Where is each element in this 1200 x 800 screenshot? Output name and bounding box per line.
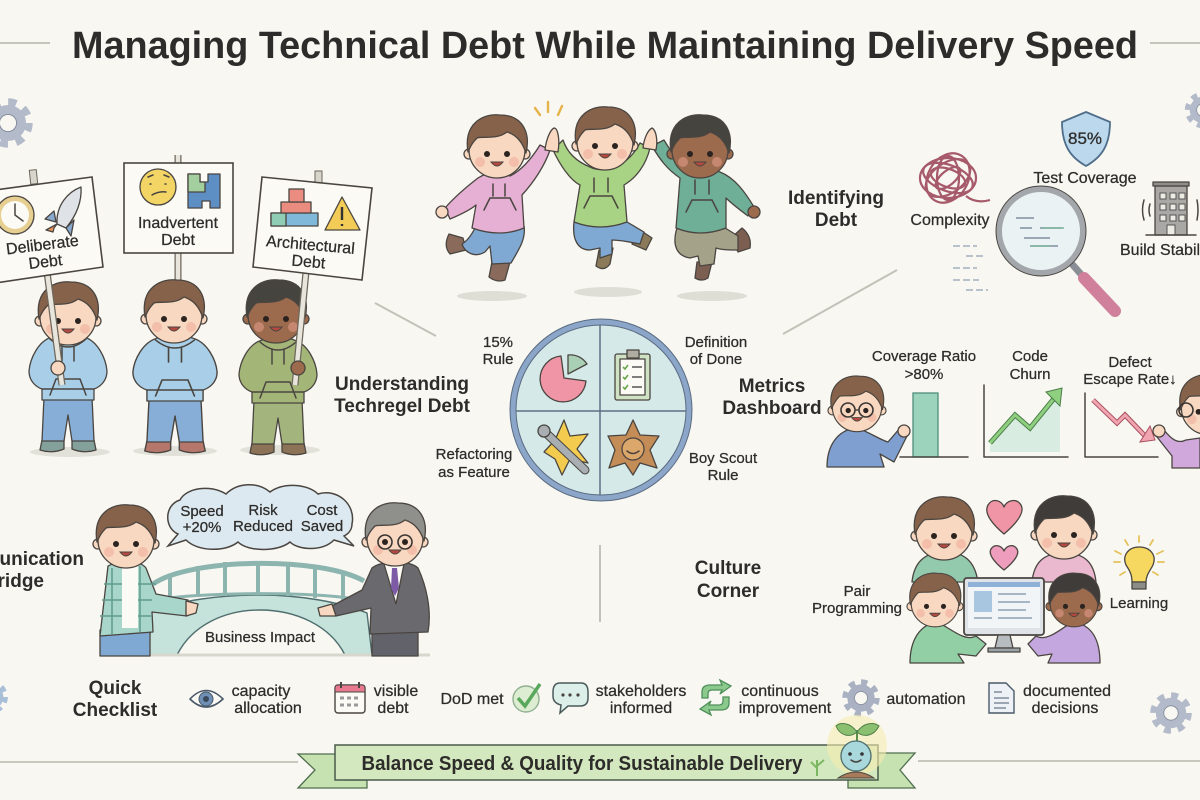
heading: culture corner [695, 558, 761, 602]
label: 15% rule: Rule [483, 351, 513, 368]
businessman [318, 503, 429, 656]
chart: code churn: Code [1012, 348, 1048, 365]
item: documented decisions: decisions [1032, 700, 1098, 717]
sign kid: deliberate debt: Deliberate [5, 233, 80, 258]
chart: code churn: Churn [1010, 366, 1050, 383]
icon: scout badge [608, 420, 659, 475]
label: boy scout rule: Boy Scout [689, 450, 758, 467]
item: continuous improvement [700, 680, 832, 717]
icon: gear bottom right [1153, 695, 1189, 731]
heading: quick checklist: Quick [89, 678, 142, 699]
panel: celebrating kids [436, 102, 760, 301]
label: definition of done: of Done [690, 351, 742, 368]
panel: communication bridge [0, 485, 430, 656]
icon: tangled yarn complexity [910, 145, 990, 229]
icon: tangled yarn complexity: Complexity [910, 212, 990, 229]
chart: code churn [984, 348, 1068, 457]
label: boy scout rule: Rule [708, 467, 738, 484]
kid: teal hoodie [652, 115, 760, 301]
panel: culture corner [695, 496, 1168, 663]
kid: green hoodie [553, 107, 652, 297]
connector line [783, 270, 897, 334]
bridge: Business Impact [205, 629, 316, 646]
speech cloud: Reduced [233, 518, 293, 535]
label: 15% rule: 15% [483, 334, 513, 351]
item: stakeholders informed [553, 683, 686, 717]
speech cloud [168, 485, 354, 550]
label: pair programming: Programming [812, 600, 902, 617]
item: capacity allocation [190, 683, 302, 717]
icon: magnifying glass [953, 186, 1115, 311]
icon: gear top left [0, 102, 29, 144]
label: boy scout rule [689, 450, 758, 484]
speech cloud: Saved [301, 518, 343, 535]
item: continuous improvement: improvement [739, 700, 832, 717]
panel: quick checklist [73, 678, 1111, 721]
item: visible debt: visible [374, 683, 418, 700]
sign kid: inadvertent debt: Debt [161, 232, 195, 249]
icon: pie chart [540, 355, 587, 402]
sign kid: inadvertent debt: Inadvertent [138, 215, 219, 232]
chart: defect escape rate: Defect [1108, 354, 1153, 371]
panel: metrics dashboard [722, 348, 1200, 468]
speech cloud: +20% [183, 519, 221, 536]
icon: seedling mascot [827, 715, 887, 778]
icon: light bulb learning: Learning [1110, 595, 1168, 612]
kid bottom left [907, 573, 986, 663]
panel: identifying debt [783, 112, 1200, 334]
label: refactoring as feature: Refactoring [436, 446, 512, 463]
sign kid: deliberate debt: Debt [28, 252, 64, 273]
heading: understanding technical debt: Techregel Debt [334, 396, 471, 417]
sparkle [535, 102, 562, 115]
kid top left [911, 497, 978, 582]
icon: shield test coverage: 85% [1068, 129, 1102, 148]
heading: metrics dashboard [722, 376, 822, 419]
heading: identifying debt: Identifying [788, 188, 884, 209]
icon: light bulb learning [1110, 536, 1168, 612]
icon: gear top right [1188, 95, 1200, 125]
icon: gear bottom left [0, 683, 5, 711]
heading: identifying debt: Debt [815, 210, 858, 231]
chart: coverage ratio [872, 348, 976, 457]
heading: metrics dashboard: Metrics [739, 376, 805, 397]
item: stakeholders informed: informed [610, 700, 672, 717]
heading: quick checklist [73, 678, 158, 721]
center wheel: practices [375, 303, 758, 622]
item: visible debt [335, 682, 418, 717]
label: refactoring as feature [436, 446, 512, 481]
kid top right [1031, 496, 1097, 582]
label: pair programming [812, 583, 902, 617]
speech cloud: Speed [180, 503, 224, 520]
kid bottom right [1028, 573, 1102, 663]
quadrant circle [510, 319, 692, 501]
icon: shield test coverage: Test Coverage [1033, 170, 1137, 187]
kid: pink hoodie [436, 115, 550, 301]
kid with glasses left [827, 376, 910, 467]
label: 15% rule [483, 334, 513, 368]
heading: understanding technical debt [334, 374, 471, 417]
bridge [100, 561, 430, 655]
heading: identifying debt [788, 188, 884, 231]
title: Managing Technical Debt While Maintaining Delivery Speed [72, 25, 1138, 67]
item: automation: automation [886, 691, 966, 708]
heading: culture corner: Culture [695, 558, 761, 579]
icon: wrench and star [538, 420, 588, 475]
label: refactoring as feature: as Feature [438, 464, 510, 481]
heading: communication bridge [0, 549, 84, 592]
sign kid: deliberate debt [0, 170, 110, 457]
panel: understanding technical debt [0, 155, 471, 457]
icon: shield test coverage [1033, 112, 1137, 187]
sign kid: architectural debt: Architectural [265, 233, 355, 258]
item: stakeholders informed: stakeholders [596, 683, 686, 700]
chart: defect escape rate: Escape Rate↓ [1083, 371, 1177, 388]
item: automation [845, 682, 966, 714]
item: continuous improvement: continuous [741, 683, 819, 700]
item: visible debt: debt [377, 700, 409, 717]
heading: quick checklist: Checklist [73, 700, 158, 721]
item: capacity allocation: capacity [232, 683, 290, 700]
item: dod met [440, 684, 540, 712]
computer monitor [964, 578, 1044, 652]
item: dod met: DoD met [440, 691, 504, 708]
speech cloud: Risk [248, 502, 278, 519]
item: capacity allocation: allocation [234, 700, 302, 717]
sign kid: inadvertent debt [124, 155, 233, 456]
label: definition of done [685, 334, 747, 368]
kid with glasses right [1153, 374, 1200, 468]
label: pair programming: Pair [844, 583, 870, 600]
developer kid in plaid [93, 505, 198, 656]
banner: balance speed and quality [0, 715, 1200, 788]
hands high five [545, 128, 657, 152]
heading: culture corner: Corner [697, 581, 760, 602]
chart: coverage ratio: Coverage Ratio [872, 348, 976, 365]
heading: understanding technical debt: Understanding [335, 374, 469, 395]
heading: metrics dashboard: Dashboard [722, 398, 822, 419]
label: definition of done: Definition [685, 334, 747, 351]
item: documented decisions [989, 683, 1111, 717]
banner: balance speed and quality: Balance Speed & Quality for Sustainable Delivery [362, 753, 803, 775]
chart: defect escape rate [1083, 354, 1177, 457]
icon: hearts [987, 501, 1022, 570]
sign kid: architectural debt: Debt [291, 253, 327, 273]
item: documented decisions: documented [1023, 683, 1111, 700]
speech cloud: Cost [307, 502, 338, 519]
chart: coverage ratio: >80% [905, 366, 943, 383]
icon: clipboard [615, 350, 650, 400]
sign kid: architectural debt [239, 171, 372, 455]
icon: building stability [1120, 182, 1200, 259]
